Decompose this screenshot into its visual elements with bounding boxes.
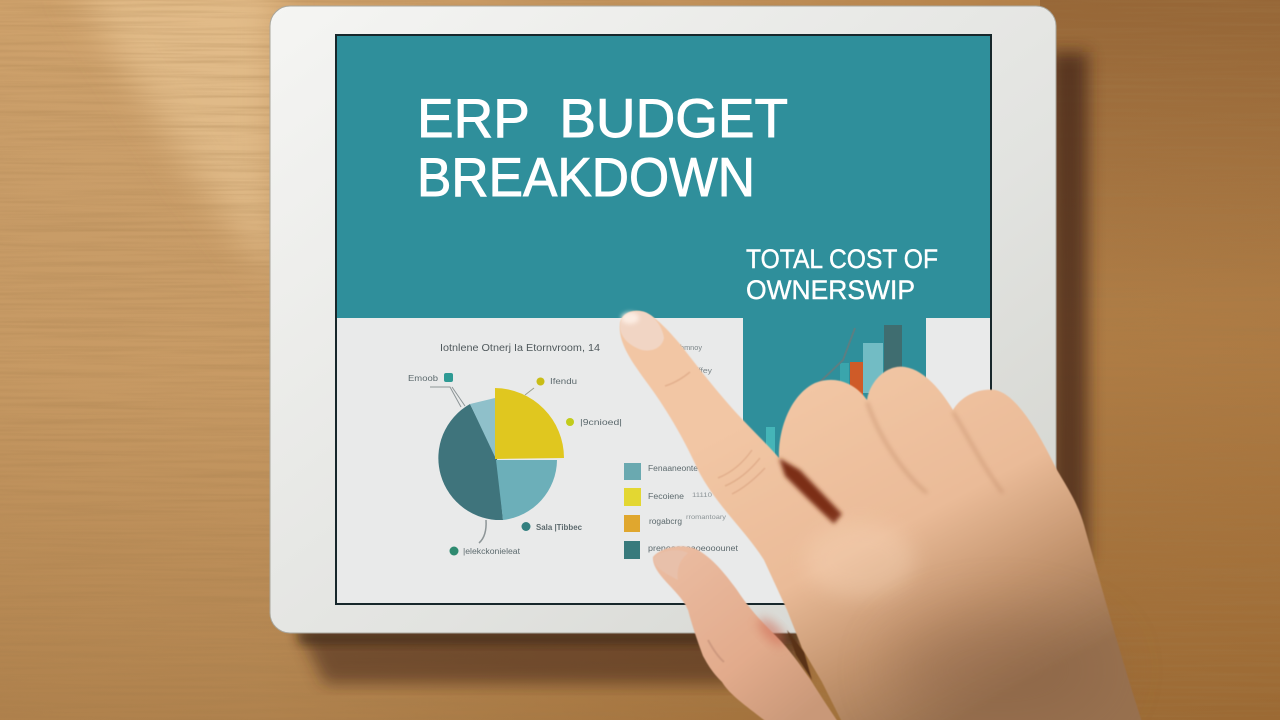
hand xyxy=(620,311,1142,720)
subtitle: total cost of ownership xyxy=(746,244,938,305)
title: BREAKDOWN xyxy=(417,146,755,208)
dark gap between index and middle finger xyxy=(779,458,842,524)
legend item: yellow: 11110 xyxy=(692,493,713,499)
index finger and back of hand xyxy=(620,311,1142,720)
label: bottom left: |elekckonieleat xyxy=(463,547,521,556)
subtitle: total cost of ownership: OWNERSWIP xyxy=(746,275,915,305)
legend item: yellow xyxy=(624,488,713,506)
thumb crease xyxy=(708,640,724,662)
thumb redness xyxy=(754,614,790,650)
faint labels behind finger: fffey xyxy=(696,368,713,375)
legend xyxy=(624,463,739,559)
pie labels xyxy=(408,373,622,556)
label: top yellow: Ifendu xyxy=(550,377,577,386)
legend item: amber: rogabcrg xyxy=(649,517,682,526)
label: top left: Emoob xyxy=(408,374,439,383)
thumb xyxy=(653,546,840,720)
pie chart xyxy=(438,388,564,520)
bar chart xyxy=(766,325,902,457)
knuckle highlight xyxy=(805,522,915,598)
tablet shadow xyxy=(296,52,1088,684)
nail highlight xyxy=(621,312,639,324)
label: bottom right xyxy=(522,522,583,532)
label: top yellow xyxy=(525,377,577,395)
screen edge xyxy=(335,34,992,605)
chart panel title: Iotnlene Otnerj Ia Etornvroom, 14 xyxy=(440,343,600,354)
legend item: amber xyxy=(624,515,726,532)
tablet xyxy=(270,6,1056,633)
subtitle: total cost of ownership: TOTAL COST OF xyxy=(746,244,938,274)
tablet frame xyxy=(270,6,1056,633)
title xyxy=(417,87,788,208)
faint labels behind finger: hmnoy xyxy=(680,345,703,352)
label: bottom right: Sala |Tibbec xyxy=(536,523,583,532)
legend item: amber: rromantoary xyxy=(686,515,726,521)
legend item: dark teal: prenoaoeoaoeooounet xyxy=(648,544,739,553)
shadow between thumb and hand xyxy=(787,630,812,680)
knuckle creases xyxy=(665,372,765,494)
finger separation shading xyxy=(867,402,1003,493)
legend item: yellow: Fecoiene xyxy=(648,492,685,501)
legend item: teal: Fenaaneonte xyxy=(648,464,699,473)
lower hand shading xyxy=(890,615,1110,720)
right white panel xyxy=(926,318,990,458)
title: ERP BUDGET xyxy=(417,87,788,149)
white chart panel xyxy=(337,318,810,603)
faint labels behind finger xyxy=(680,345,713,375)
index finger nail xyxy=(620,311,664,350)
label: right yellow xyxy=(566,418,622,427)
label: right yellow: |9cnioed| xyxy=(580,418,622,427)
label: bottom left xyxy=(450,520,521,556)
screen teal background xyxy=(337,36,990,603)
thumb nail xyxy=(654,550,688,580)
label: top left xyxy=(408,373,465,407)
